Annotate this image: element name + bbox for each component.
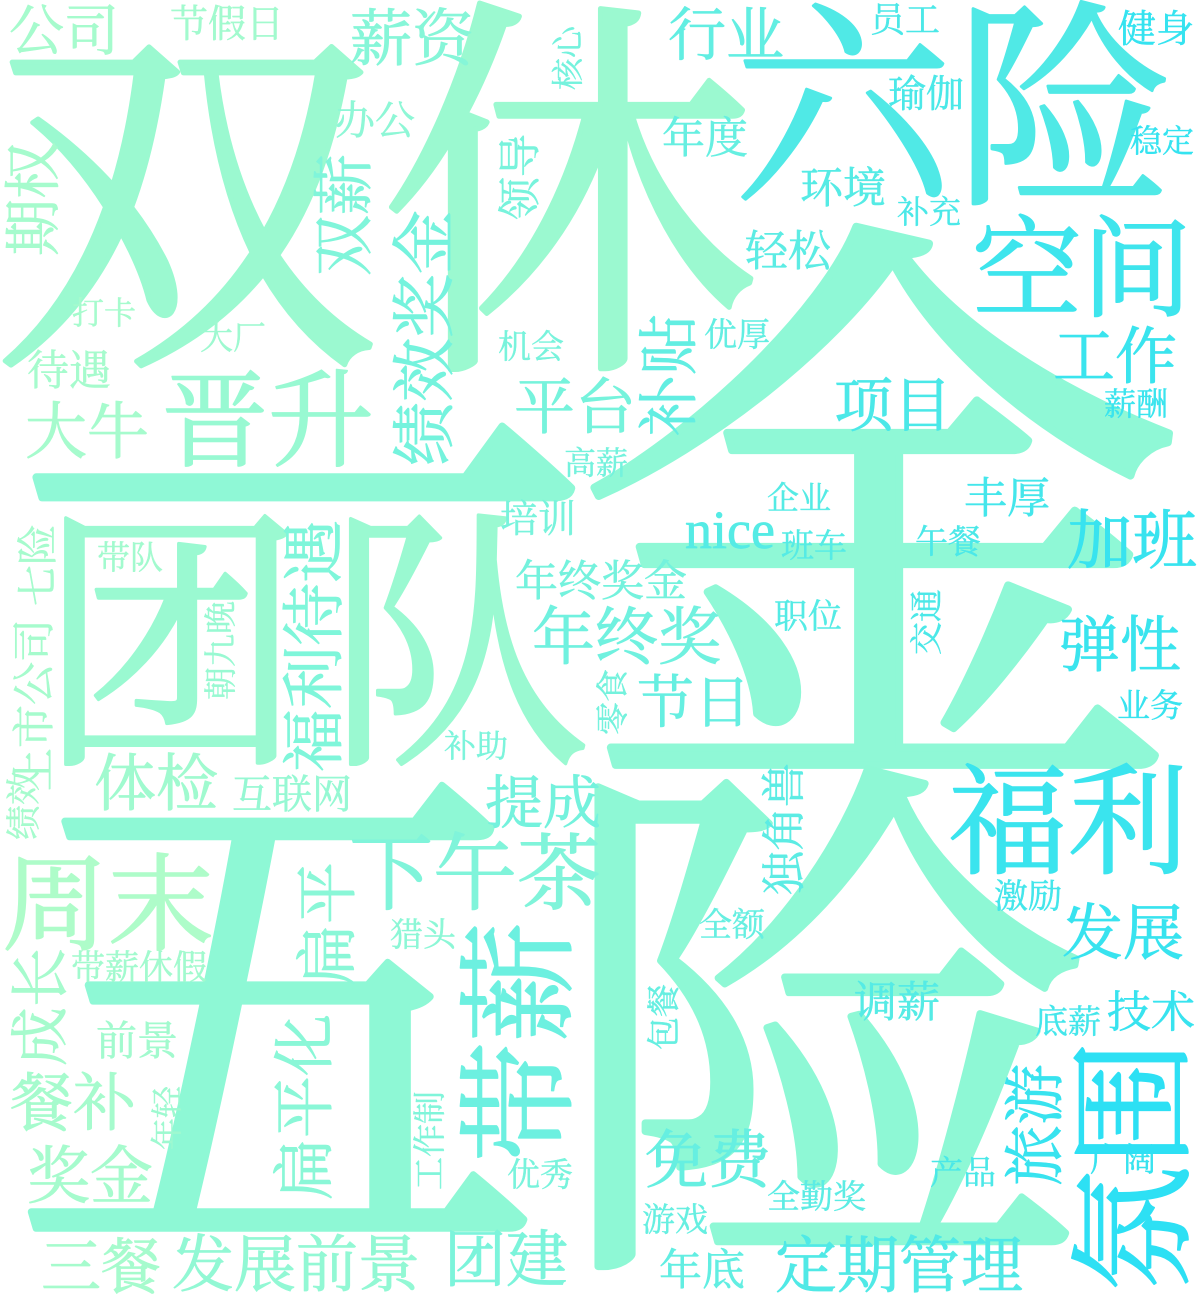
word: 五险 xyxy=(11,729,1102,1300)
word: 福利: 福利 xyxy=(948,757,1188,890)
word: 加班: 加班 xyxy=(1067,506,1197,578)
word: 一金: 金 xyxy=(576,200,1188,867)
word: 工作: 工作 xyxy=(1053,324,1177,392)
word: 高薪: 高薪 xyxy=(564,445,628,481)
word: 丰厚: 丰厚 xyxy=(964,476,1050,523)
word: 补充: 补充 xyxy=(897,194,961,230)
word: 业务: 业务 xyxy=(1117,688,1183,725)
word: 前景: 前景 xyxy=(96,1018,178,1064)
word: 团队: 团 xyxy=(38,497,303,803)
word: 福利待遇: 福利待遇 xyxy=(280,520,350,772)
word: 上市公司: 上市公司 xyxy=(12,619,59,791)
word: 带薪休假: 带薪休假 xyxy=(71,949,207,987)
word: 年轻: 年轻 xyxy=(149,1085,185,1150)
word: 团队 xyxy=(38,497,591,803)
word: 年终奖金: 年终奖金 xyxy=(515,558,687,606)
word: 班车: 班车 xyxy=(781,528,847,565)
word: 补助: 补助 xyxy=(444,728,508,764)
word: 猎头: 猎头 xyxy=(390,917,457,954)
word: 优厚: 优厚 xyxy=(704,317,770,354)
word: 包餐: 包餐 xyxy=(646,984,683,1050)
word: 年终奖: 年终奖 xyxy=(532,603,721,673)
word: 一金: 一 xyxy=(8,195,596,874)
word: 发展前景: 发展前景 xyxy=(172,1232,420,1300)
word: 发展: 发展 xyxy=(1062,901,1184,968)
word: 职位: 职位 xyxy=(774,598,842,636)
word: 定期管理: 定期管理 xyxy=(775,1233,1023,1300)
word: 广阔: 广阔 xyxy=(1090,1142,1156,1179)
word: 稳定: 稳定 xyxy=(1130,123,1194,159)
word: 待遇: 待遇 xyxy=(27,349,111,395)
word: 游戏: 游戏 xyxy=(642,1202,708,1239)
word: 一金 xyxy=(8,195,1188,874)
word: 节日: 节日 xyxy=(637,672,751,735)
word: 轻松: 轻松 xyxy=(745,229,832,276)
word: 餐补: 餐补 xyxy=(10,1069,136,1139)
word: 体检: 体检 xyxy=(94,751,218,819)
word: 核心: 核心 xyxy=(550,25,586,90)
word: 扁平: 扁平 xyxy=(295,862,363,986)
word: 激励: 激励 xyxy=(994,878,1062,916)
word: 工作制: 工作制 xyxy=(412,1091,449,1190)
word: 免费: 免费 xyxy=(645,1126,773,1196)
word: 大厂: 大厂 xyxy=(200,320,266,357)
word: 带队: 带队 xyxy=(97,540,163,577)
word: 晋升: 晋升 xyxy=(162,364,374,481)
word: 薪酬: 薪酬 xyxy=(1104,386,1168,422)
word: 大牛: 大牛 xyxy=(25,399,149,467)
word: 空间: 空间 xyxy=(972,210,1192,332)
word: 绩效奖金: 绩效奖金 xyxy=(390,210,461,466)
word: 提成: 提成 xyxy=(485,771,601,836)
word: 团队: 队 xyxy=(326,497,591,803)
word: 午餐: 午餐 xyxy=(915,524,981,561)
word: 培训: 培训 xyxy=(500,499,576,541)
word: 双休: 双 xyxy=(0,12,380,415)
word: 环境: 环境 xyxy=(800,165,886,213)
word: 调薪: 调薪 xyxy=(854,980,940,1027)
word: 互联网: 互联网 xyxy=(232,772,352,817)
word: 全勤奖: 全勤奖 xyxy=(767,1179,866,1216)
word: 三餐: 三餐 xyxy=(41,1235,161,1300)
word: nice: nice xyxy=(685,500,775,560)
word: 补贴: 补贴 xyxy=(637,314,704,436)
word: 打卡: 打卡 xyxy=(72,295,136,331)
word: 公司: 公司 xyxy=(9,1,119,62)
word: 瑜伽: 瑜伽 xyxy=(888,74,964,116)
word: 奖金: 奖金 xyxy=(27,1142,153,1212)
word: 年度: 年度 xyxy=(662,115,748,163)
word: 优秀: 优秀 xyxy=(507,1157,573,1194)
word: 全额: 全额 xyxy=(699,907,766,944)
word: 带薪: 带薪 xyxy=(454,922,587,1162)
word: 七险: 七险 xyxy=(15,524,61,606)
word: 企业: 企业 xyxy=(767,480,831,516)
word: 项目: 项目 xyxy=(834,373,952,439)
word: 周末: 周末 xyxy=(2,848,214,965)
word: 底薪: 底薪 xyxy=(1035,1004,1101,1041)
word: 绩效: 绩效 xyxy=(5,770,44,840)
word: 下午茶: 下午茶 xyxy=(349,829,601,922)
word: 行业: 行业 xyxy=(668,3,784,68)
word: 零食: 零食 xyxy=(595,669,632,735)
word: 团建: 团建 xyxy=(444,1227,568,1295)
word: 扁平化: 扁平化 xyxy=(272,1014,340,1200)
word: 期权: 期权 xyxy=(3,142,66,256)
word: 机会: 机会 xyxy=(498,329,564,366)
word: 双休 xyxy=(0,0,760,426)
word: 旅游: 旅游 xyxy=(1003,1064,1070,1186)
word: 朝九晚: 朝九晚 xyxy=(203,601,240,700)
word: 双薪: 双薪 xyxy=(312,154,379,276)
word: 节假日: 节假日 xyxy=(170,4,284,46)
word: 办公: 办公 xyxy=(335,98,415,143)
word: 领导: 领导 xyxy=(497,134,545,220)
word: 产品: 产品 xyxy=(930,1155,996,1192)
word: 交通: 交通 xyxy=(909,589,946,655)
word: 平台: 平台 xyxy=(514,375,636,442)
word: 弹性: 弹性 xyxy=(1059,613,1181,680)
word: 健身: 健身 xyxy=(1118,9,1194,51)
word: 独角兽: 独角兽 xyxy=(760,763,809,895)
word: 成长: 成长 xyxy=(8,948,74,1066)
word: 员工: 员工 xyxy=(870,1,940,40)
word: 薪资: 薪资 xyxy=(350,6,476,74)
word: 技术: 技术 xyxy=(1107,988,1195,1037)
word: 年底: 年底 xyxy=(659,1247,745,1295)
